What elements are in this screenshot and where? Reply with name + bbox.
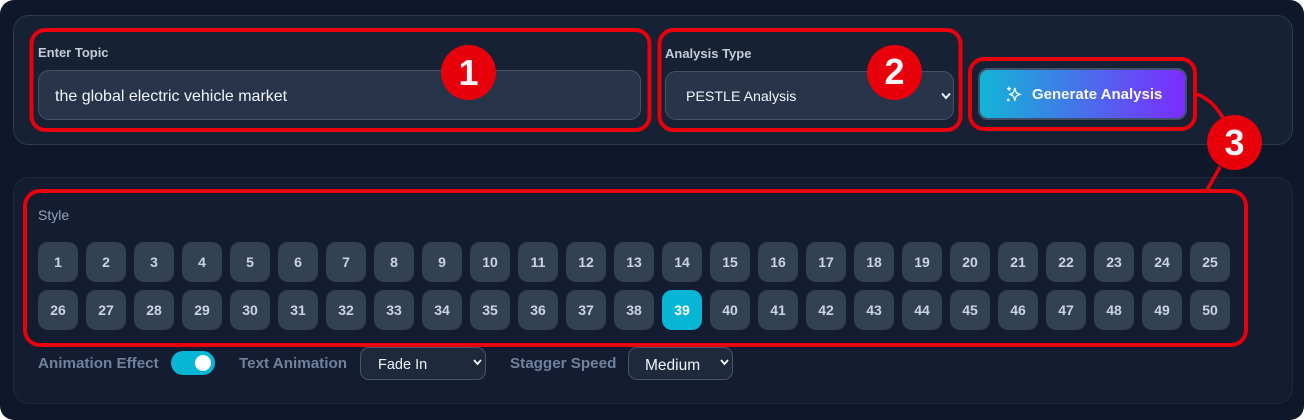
label: text animation: Text Animation (239, 355, 347, 372)
badge 1 (441, 45, 496, 100)
style number grid: 46 (1010, 302, 1026, 318)
style number grid: 42 (818, 302, 834, 318)
style number grid: 20 (962, 254, 978, 270)
button: generate analysis (978, 68, 1187, 120)
style number grid: 25 (1202, 254, 1218, 270)
style number grid: 15 (722, 254, 738, 270)
select: analysis type: PESTLE Analysis (686, 89, 796, 105)
style number grid: 22 (1058, 254, 1074, 270)
style number grid: 17 (818, 254, 834, 270)
style number grid: 33 (386, 302, 402, 318)
select: medium (628, 347, 733, 380)
button label: Generate Analysis (1032, 86, 1162, 103)
toggle: animation on (171, 351, 215, 375)
input: topic: the global electric vehicle market (55, 88, 287, 105)
style number grid: 8 (390, 254, 398, 270)
heading: style: Style (38, 207, 69, 223)
label: stagger speed: Stagger Speed (510, 355, 616, 372)
style number grid: 6 (294, 254, 302, 270)
select: fade in (360, 347, 486, 380)
style number grid: 45 (962, 302, 978, 318)
style number grid: 21 (1010, 254, 1026, 270)
style number grid (38, 242, 1230, 330)
style number grid: 27 (98, 302, 114, 318)
style number grid: 19 (914, 254, 930, 270)
label: animation effect: Animation Effect (38, 355, 159, 372)
style number grid: 49 (1154, 302, 1170, 318)
style number grid: 4 (198, 254, 206, 270)
style number grid: 16 (770, 254, 786, 270)
heading: analysis type: Analysis Type (665, 46, 751, 61)
highlight box 1 (32, 30, 650, 130)
style number grid: 47 (1058, 302, 1074, 318)
select: analysis type (665, 71, 954, 120)
style number grid: 26 (50, 302, 66, 318)
badge 1: 1 (458, 52, 479, 93)
icon: sparkles (1006, 86, 1022, 102)
badge 2 (867, 45, 922, 100)
heading: enter topic: Enter Topic (38, 45, 109, 60)
style number grid: 1 (54, 254, 62, 270)
style number grid: 2 (102, 254, 110, 270)
badge 2: 2 (884, 51, 905, 92)
style number grid: 11 (531, 254, 545, 270)
style number grid: 43 (866, 302, 882, 318)
style number grid: 28 (146, 302, 162, 318)
style number grid: 32 (338, 302, 354, 318)
style number grid: 9 (438, 254, 446, 270)
style number grid: 39 (674, 302, 690, 318)
style number grid: 48 (1106, 302, 1122, 318)
connector lines (1197, 94, 1223, 190)
highlight box 3 (970, 59, 1195, 129)
panel: style and animation settings (13, 177, 1293, 404)
style number grid: 13 (626, 254, 642, 270)
badge 3: 3 (1224, 122, 1245, 163)
style number grid: 34 (434, 302, 450, 318)
style number grid: 29 (194, 302, 210, 318)
style number grid: 23 (1106, 254, 1122, 270)
style number grid: 7 (342, 254, 350, 270)
badge 3 (1207, 115, 1262, 170)
style number grid: 50 (1202, 302, 1218, 318)
select: medium: Medium (645, 357, 700, 374)
style number grid: 3 (150, 254, 158, 270)
style number grid: 5 (246, 254, 254, 270)
style number grid: 12 (578, 254, 594, 270)
style number grid: 30 (242, 302, 258, 318)
style number grid: 14 (674, 254, 690, 270)
select: fade in: Fade In (378, 357, 427, 373)
style number grid: 41 (770, 302, 786, 318)
style number grid: 35 (482, 302, 498, 318)
style number grid: 38 (626, 302, 642, 318)
style number grid: 40 (722, 302, 738, 318)
style number grid: 24 (1154, 254, 1170, 270)
style number grid: 18 (866, 254, 882, 270)
style number grid: 36 (530, 302, 546, 318)
style number grid: 37 (578, 302, 594, 318)
style number grid: 31 (290, 302, 306, 318)
style number grid: 44 (914, 302, 930, 318)
highlight box 2 (660, 30, 960, 130)
input: topic (38, 70, 641, 120)
highlight box style grid (25, 191, 1246, 345)
style number grid: 10 (482, 254, 498, 270)
panel: topic and analysis inputs (13, 15, 1293, 145)
